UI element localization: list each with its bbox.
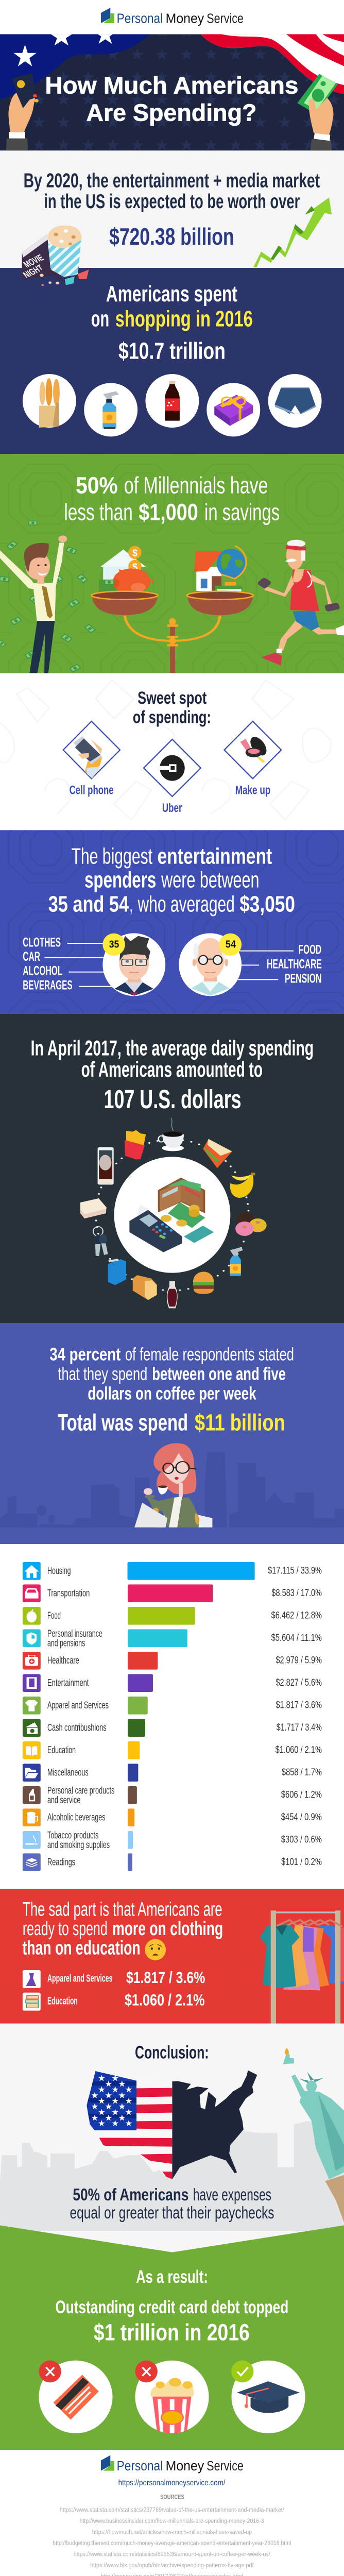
chart row: Cash contributions: Cash contribushions xyxy=(47,1722,107,1733)
illustration: wallet and payment terminal xyxy=(114,1157,230,1273)
heading: as a result: As a result: xyxy=(136,2267,208,2287)
panel: result credit card debt xyxy=(0,2225,344,2450)
heading: entertainment spenders: 35 and 54 xyxy=(48,891,129,917)
stat: 720.38 billion: $720.38 billion xyxy=(109,224,234,250)
icon: movie clapper xyxy=(21,234,79,280)
title: Are Spending? xyxy=(86,99,256,126)
icon: baguettes xyxy=(23,374,76,428)
heading: entertainment spenders xyxy=(48,843,295,917)
background doodles xyxy=(0,680,331,820)
text: source list xyxy=(53,2506,291,2576)
panel: entertainment and media market xyxy=(0,150,344,286)
link: website: https://personalmoneyservice.com/ xyxy=(118,2478,226,2487)
logo: Personal Money Service xyxy=(101,2455,244,2473)
icon: cleaning spray xyxy=(230,1247,243,1276)
icon: box xyxy=(80,1198,107,1218)
icon: soda bottle small xyxy=(167,1281,178,1308)
row: apparel xyxy=(23,1968,205,1988)
chart row: Transportation: Transportation xyxy=(47,1587,90,1599)
chart row: Miscellaneous xyxy=(23,1764,322,1782)
icon: movie clapper: NIGHT xyxy=(21,263,45,280)
heading: sweet spot: Sweet spot xyxy=(137,688,207,708)
label: Make up xyxy=(235,783,270,797)
skyline xyxy=(0,2121,344,2231)
logo: Personal Money Service: Service xyxy=(207,2459,244,2473)
icon: gift box xyxy=(207,383,260,436)
icon: keys xyxy=(93,1227,108,1256)
panel: biggest entertainment spenders xyxy=(0,830,344,1014)
icon: graduation cap approved xyxy=(231,2361,305,2433)
heading: entertainment spenders: The biggest xyxy=(71,843,152,869)
heading: sources: SOURCES xyxy=(160,2494,184,2500)
chart row: Personal insurance xyxy=(23,1628,322,1649)
item: cell phone xyxy=(63,721,120,797)
logo: Personal Money Service xyxy=(101,8,244,26)
chart row: Readings xyxy=(23,1853,322,1871)
text: source list: https://www.bls.gov/opub/btn/archive/spending-patterns-by-age.pdf xyxy=(90,2562,254,2569)
text: coffee statement xyxy=(49,1344,294,1435)
chart row: Food: Food xyxy=(47,1610,61,1621)
logo: Personal Money Service: Service xyxy=(207,11,244,26)
chart row: Apparel and Services xyxy=(23,1697,322,1715)
chart row: Food xyxy=(23,1607,322,1625)
text: 50 percent of Americans: have expenses xyxy=(193,2185,271,2205)
heading: sad part xyxy=(22,1899,223,1959)
heading: sad part: than on education xyxy=(22,1937,141,1959)
illustration: happy young man xyxy=(0,535,67,673)
heading: Americans spent on shopping: shopping in 2016 xyxy=(115,306,253,331)
chart row: Readings: Readings xyxy=(47,1856,75,1868)
panel: header xyxy=(0,0,344,35)
icon: popcorn box xyxy=(48,226,82,277)
dotted ring xyxy=(96,1140,249,1291)
panel: clothing versus education xyxy=(0,1889,344,2024)
heading: sad part: ready to spend xyxy=(23,1918,108,1940)
chart row: Tobacco: Tobacco products xyxy=(47,1829,98,1841)
chart row: Personal insurance: and pensions xyxy=(47,1637,85,1649)
illustration: woman drinking coffee xyxy=(134,1443,212,1528)
illustration: balance scale xyxy=(92,580,253,673)
chart row: Miscellaneous: Miscellaneous xyxy=(47,1767,89,1778)
chart row: Entertainment: Entertainment xyxy=(47,1677,89,1688)
illustration: bank, piggy and coins on scale: $ xyxy=(132,562,137,572)
panel: coffee spending xyxy=(0,1323,344,1545)
icon: spray bottle xyxy=(84,383,137,436)
illustration: old man running xyxy=(256,540,344,666)
icon: movie clapper: MOVIE xyxy=(22,253,46,270)
row: education: $1.060 / 2.1% xyxy=(125,1991,204,2009)
chart row: Tobacco: and smoking supplies xyxy=(47,1839,110,1850)
icon: donuts xyxy=(235,1212,267,1236)
icon: sad emoji xyxy=(145,1939,166,1960)
money background xyxy=(0,520,96,672)
chart row: Healthcare xyxy=(23,1652,322,1670)
heading: 50 percent of Millennials: in savings xyxy=(204,499,280,525)
panel: shopping in 2016 xyxy=(0,268,344,454)
logo: Personal Money Service: Money xyxy=(166,11,204,26)
stat: 10.7 trillion: $10.7 trillion xyxy=(118,338,226,364)
chart row: Personal care: and service xyxy=(47,1794,80,1805)
icon: fries xyxy=(125,1130,146,1160)
badge: 35: 35 xyxy=(109,939,119,951)
text: market forecast xyxy=(24,170,320,213)
chart row: Education: Education xyxy=(47,1744,76,1755)
panel: average daily spending xyxy=(0,1014,344,1323)
heading: entertainment spenders: , xyxy=(129,891,133,917)
icon: iced drink xyxy=(98,1147,114,1184)
heading: Americans spent on shopping xyxy=(91,281,253,331)
text: coffee statement: that they spend xyxy=(58,1364,147,1384)
heading: entertainment spenders: were between xyxy=(161,867,260,892)
heading: sweet spot: of spending: xyxy=(133,708,211,727)
icon: hand with dollars xyxy=(297,74,338,150)
heading: Americans spent on shopping: Americans spent xyxy=(106,281,237,307)
panel: millennials savings xyxy=(0,454,344,674)
heading: April 2017 daily spending xyxy=(31,1037,314,1082)
panel: sweet spot of spending xyxy=(0,673,344,831)
chart row: Education xyxy=(23,1741,322,1759)
heading: entertainment spenders: who averaged xyxy=(137,891,235,917)
chart row: Apparel and Services: Apparel and Services xyxy=(47,1700,109,1710)
heading: entertainment spenders: $3,050 xyxy=(239,891,295,917)
logo: Personal Money Service: Personal xyxy=(117,11,163,26)
avatar: 54 year old xyxy=(179,933,242,996)
label: Cell phone xyxy=(70,783,114,797)
chart row: Transportation xyxy=(23,1584,322,1602)
icon: burger xyxy=(193,1272,214,1294)
map: flag half xyxy=(83,2071,172,2181)
heading: sad part: more on clothing xyxy=(112,1918,223,1940)
icon: sandwich xyxy=(203,1139,232,1168)
heading: 50 percent of Millennials xyxy=(64,472,280,525)
labels: age 54 spending xyxy=(238,943,322,986)
labels: age 35 spending: ALCOHOL xyxy=(23,964,62,978)
icon: rising green arrow xyxy=(253,197,332,267)
heading: conclusion: Conclusion: xyxy=(135,2042,209,2063)
chart row: Personal care: Personal care products xyxy=(47,1785,114,1796)
row: education: Education xyxy=(47,1995,78,2007)
label: Uber xyxy=(162,801,182,815)
stat: 11 billion: $11 billion xyxy=(195,1410,285,1435)
chart row: Alcoholic beverages: Alcoholic beverages xyxy=(47,1811,105,1823)
icon: popcorn crossed xyxy=(135,2361,209,2435)
logo: Personal Money Service: Personal xyxy=(117,2459,163,2473)
icon: 3D glasses xyxy=(40,269,90,286)
labels: age 35 spending: CLOTHES xyxy=(23,936,61,950)
heading: entertainment spenders: entertainment xyxy=(157,843,272,869)
badge: 54: 54 xyxy=(226,939,236,951)
icon: denim shorts xyxy=(268,374,322,428)
chart row: Housing: Housing xyxy=(47,1565,71,1576)
panel: expenditure bar chart xyxy=(0,1544,344,1889)
panel: hero banner xyxy=(0,25,344,150)
icon: hand with credit card xyxy=(6,74,39,150)
row: apparel: Apparel and Services xyxy=(47,1973,113,1985)
chart row: Healthcare: Healthcare xyxy=(47,1655,79,1666)
heading: entertainment spenders: spenders xyxy=(84,867,156,892)
stat: 11 billion: Total was spend xyxy=(58,1410,188,1435)
illustration: bank, piggy and coins on scale: $ xyxy=(132,548,137,558)
icon: bread xyxy=(133,1275,157,1300)
heading: sweet spot xyxy=(133,688,211,727)
chart row: Housing xyxy=(23,1562,322,1580)
text: 50 percent of Americans xyxy=(70,2185,274,2223)
chart row: Alcoholic beverages xyxy=(23,1808,322,1826)
heading: Americans spent on shopping: on xyxy=(91,306,109,331)
illustration: bank, piggy and coins on scale xyxy=(99,546,153,596)
logo: Personal Money Service: Money xyxy=(166,2459,204,2473)
icon: soda bottle xyxy=(145,374,199,428)
text: source list: https://howmuch.net/articles/how-much-millennials-have-saved-up xyxy=(92,2529,252,2535)
text: source list: http://www.businessinsider.com/how-millennials-are-spending-money-2016-3 xyxy=(80,2518,264,2524)
illustration: house, globe and books on scale xyxy=(194,546,246,595)
text: 50 percent of Americans: 50% of Americans xyxy=(73,2185,188,2205)
text: coffee statement: 34 percent xyxy=(49,1344,121,1365)
skyline xyxy=(0,1452,344,1528)
map: dark half xyxy=(172,2070,257,2179)
chart row: Tobacco xyxy=(23,1829,322,1850)
chart row: Personal care xyxy=(23,1785,322,1805)
title xyxy=(45,73,298,126)
labels: age 35 spending: BEVERAGES xyxy=(23,978,73,993)
heading: 50 percent of Millennials: 50% xyxy=(76,472,118,498)
avatar: 35 year old xyxy=(102,933,165,996)
illustration: statue of liberty xyxy=(283,2048,344,2222)
icon: coffee xyxy=(159,1118,184,1151)
icon: fuel canister xyxy=(108,1259,126,1285)
icon: credit card crossed xyxy=(39,2361,113,2433)
illustration: clothes rack xyxy=(260,1910,344,2024)
row: education xyxy=(23,1991,204,2011)
item: make up xyxy=(224,721,281,797)
chart row: Personal insurance: Personal insurance xyxy=(47,1628,102,1639)
labels: age 35 spending: CAR xyxy=(23,950,40,964)
chart row: Entertainment xyxy=(23,1674,322,1692)
heading: 50 percent of Millennials: less than xyxy=(64,499,133,525)
icon: bananas xyxy=(230,1173,255,1198)
panel: footer xyxy=(0,2450,344,2576)
labels: age 35 spending xyxy=(23,936,113,993)
stat: 1 trillion: $1 trillion in 2016 xyxy=(94,2319,250,2346)
item: uber xyxy=(144,739,201,815)
heading: 50 percent of Millennials: $1,000 xyxy=(139,499,198,525)
panel: conclusion xyxy=(0,2024,344,2264)
chart row: Cash contributions xyxy=(23,1719,322,1737)
row: apparel: $1.817 / 3.6% xyxy=(126,1968,205,1987)
